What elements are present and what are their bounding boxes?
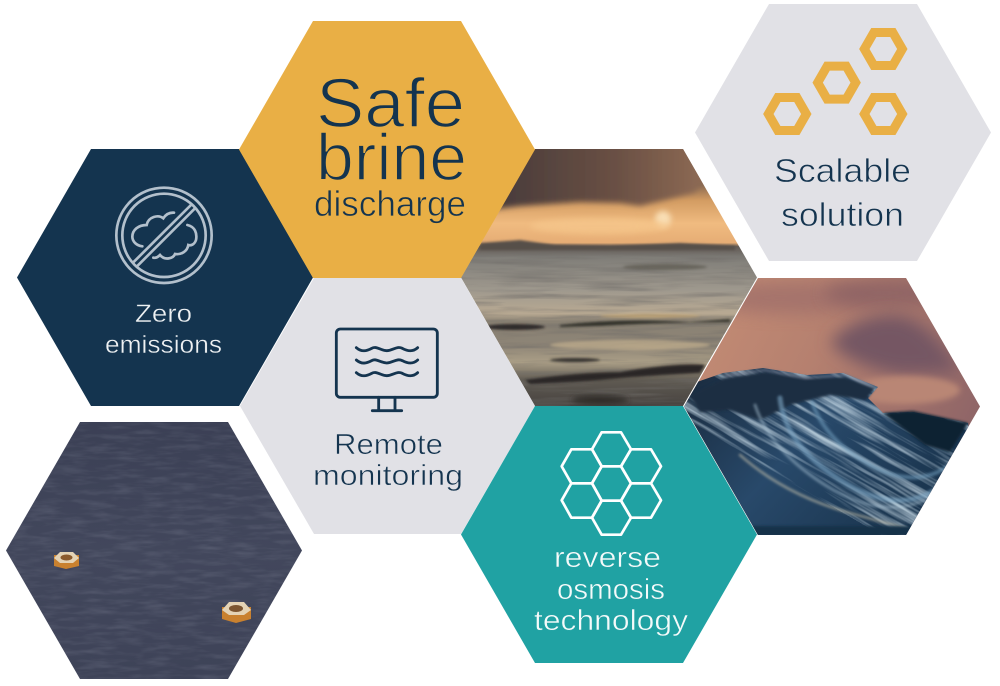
panel: aerial sea photo with floating buoys [6,422,302,679]
buoy left [54,552,79,569]
panel: reverse osmosis technology [461,406,757,663]
label: scalable solution [774,152,911,233]
label: reverse osmosis technology: osmosis [557,574,665,606]
heading: safe brine discharge [314,64,467,224]
label: zero emissions: Zero [135,300,192,328]
label: scalable solution: solution [781,196,904,233]
label: remote monitoring [313,429,463,492]
label: scalable solution: Scalable [774,152,911,189]
icon: monitor with waves [336,329,437,411]
panel: sunset sea photo [461,140,757,406]
panel: remote monitoring [240,278,535,534]
heading: safe brine discharge: Safe [316,64,465,142]
heading: safe brine discharge: discharge [314,183,466,224]
label: zero emissions: emissions [105,331,222,359]
icon: four gold hexagons [768,32,902,130]
panel: breaking wave photo [684,278,980,535]
label: reverse osmosis technology: technology [534,605,689,637]
label: reverse osmosis technology: reverse [554,542,661,574]
panel: safe brine discharge [239,21,535,278]
panel: scalable solution [695,4,991,261]
heading: safe brine discharge: brine [316,120,467,194]
buoy right [222,602,251,623]
icon: honeycomb [562,432,661,535]
label: reverse osmosis technology [534,542,689,637]
label: remote monitoring: monitoring [313,460,463,492]
label: remote monitoring: Remote [334,429,443,461]
label: zero emissions [105,300,222,359]
icon: crossed-out cloud [116,188,212,283]
panel: zero emissions [17,149,313,406]
